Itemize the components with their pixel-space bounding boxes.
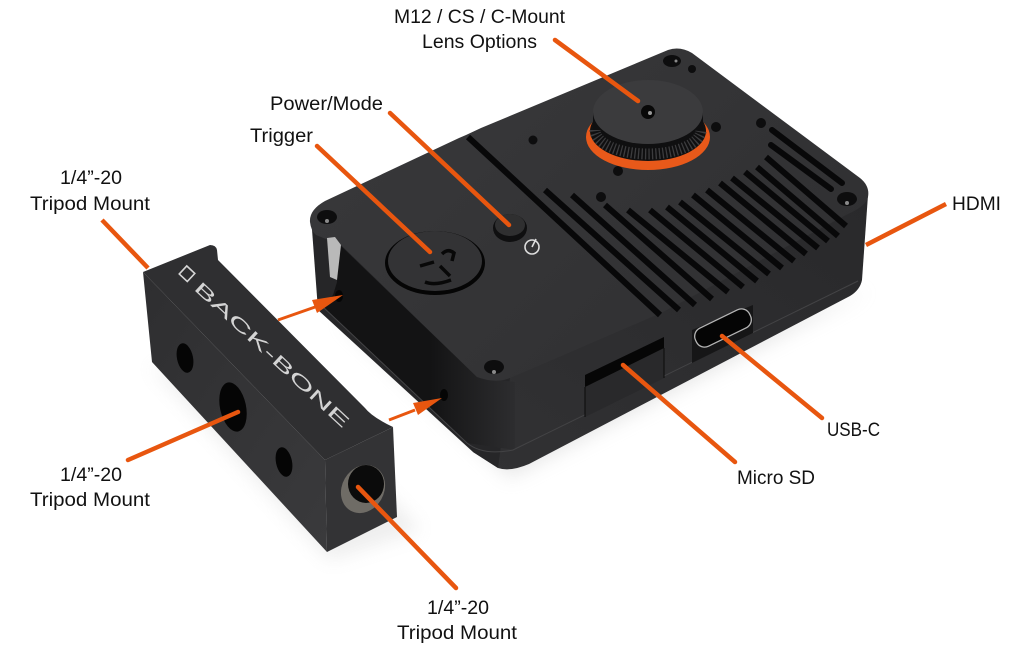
label: tripod mount top: Tripod Mount <box>30 194 151 215</box>
arrow: bar to lower mount hole <box>389 398 442 420</box>
label: tripod mount top: 1/4”-20 <box>60 168 122 189</box>
label: tripod mount bottom: Tripod Mount <box>397 623 518 644</box>
label: tripod mount bottom: 1/4”-20 <box>427 598 489 619</box>
label: tripod mount middle: Tripod Mount <box>30 490 151 511</box>
left side cavity <box>322 244 515 450</box>
cooling fins <box>468 130 846 315</box>
tripod mount bar <box>143 245 397 552</box>
orange ring <box>586 104 710 170</box>
bar end face <box>325 427 397 552</box>
end threaded hole <box>332 457 394 521</box>
grey strip <box>327 237 341 280</box>
trigger button <box>385 231 485 295</box>
bar front face <box>143 272 327 552</box>
top face <box>310 49 868 381</box>
body right side <box>473 195 868 469</box>
label: lens options: Lens Options <box>422 32 537 53</box>
logo box <box>179 266 195 281</box>
label: lens options: M12 / CS / C-Mount <box>394 7 566 28</box>
label: tripod mount middle <box>30 465 151 511</box>
power button <box>493 214 527 242</box>
screws <box>317 55 857 374</box>
logo text: BACK-BONE <box>190 278 353 432</box>
lens glass <box>641 105 655 119</box>
label: lens options <box>394 7 566 53</box>
leader lines <box>102 40 946 588</box>
arrow: bar to upper mount hole <box>278 295 343 320</box>
USB-C port <box>692 305 754 363</box>
label: HDMI: HDMI <box>952 194 1001 215</box>
body left side outer band <box>311 216 510 468</box>
knurled barrel <box>593 112 703 160</box>
mounting holes <box>335 290 448 401</box>
label: tripod mount middle: 1/4”-20 <box>60 465 122 486</box>
label: USB-C: USB-C <box>827 420 880 441</box>
camera body <box>310 49 868 469</box>
lens cap <box>593 80 703 144</box>
screw highlights <box>325 60 849 374</box>
label: Micro SD: Micro SD <box>737 468 815 489</box>
label: power/mode: Power/Mode <box>270 94 383 115</box>
label: tripod mount top <box>30 168 151 215</box>
micro SD slot <box>585 337 664 417</box>
bar top face <box>143 245 393 460</box>
lens assembly <box>586 80 710 170</box>
bar holes <box>174 342 295 478</box>
label: tripod mount bottom <box>397 598 518 644</box>
lower lip line <box>322 281 858 452</box>
label: trigger: Trigger <box>250 126 314 147</box>
icon: power symbol <box>525 239 539 254</box>
